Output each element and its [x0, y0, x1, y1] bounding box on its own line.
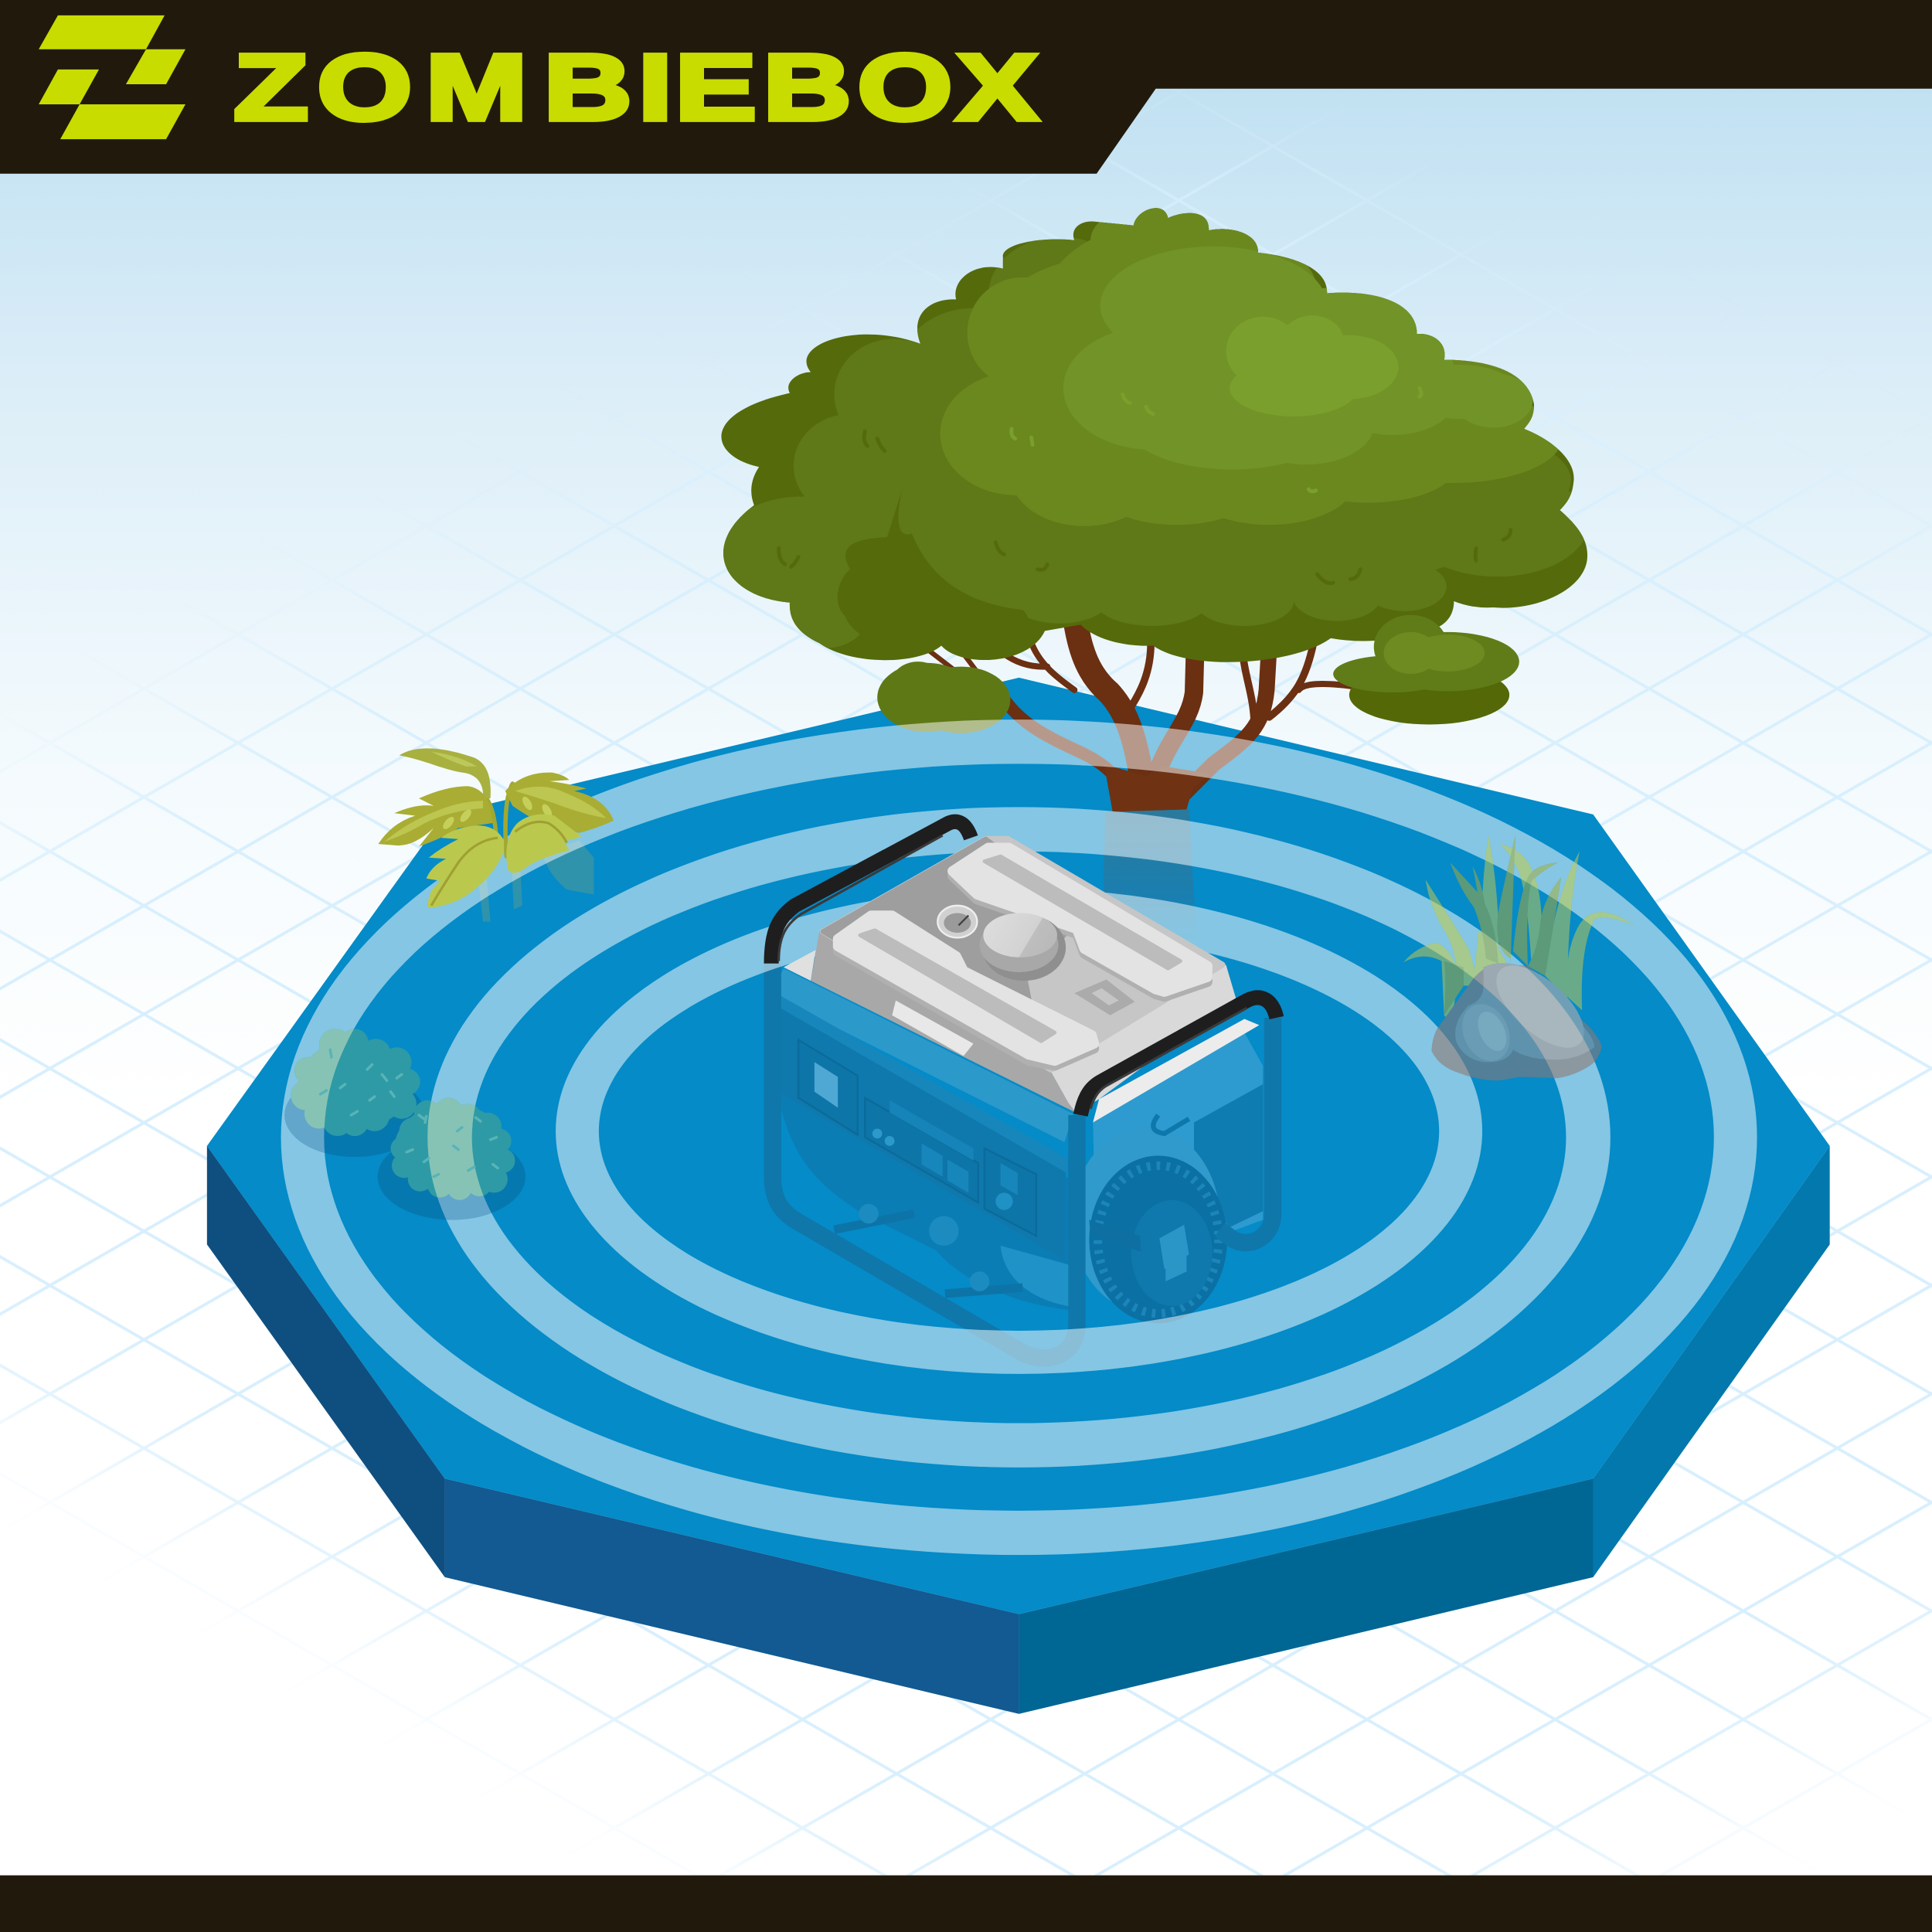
canopy silhouette [721, 208, 1587, 662]
leaf: bottom right [506, 815, 582, 872]
small left bush [877, 662, 1010, 733]
generator above water [771, 821, 1277, 1122]
housing right face [1051, 964, 1236, 1113]
rear plate [784, 950, 815, 981]
plant reflection in water [478, 840, 594, 922]
tree [719, 203, 1588, 812]
right upper panel [1093, 1032, 1263, 1281]
leaf: bottom left [427, 825, 504, 908]
submerged trunk [1103, 810, 1198, 961]
left handle [771, 821, 971, 964]
leaf: left [378, 786, 493, 846]
submerged bushes [284, 1029, 526, 1219]
fuel cap [980, 913, 1066, 981]
tropical plant [378, 748, 614, 908]
water ripple rings [281, 719, 1757, 1555]
fuel gauge [937, 906, 977, 937]
housing top [823, 839, 1223, 1070]
logo icon [39, 15, 185, 139]
front lid panel [838, 916, 1094, 1066]
canopy shading layers [719, 203, 1588, 650]
generator submerged body [769, 964, 1273, 1358]
lower tank highlight [1001, 1246, 1084, 1308]
control panel face [769, 991, 1066, 1260]
housing left face [811, 931, 1076, 1113]
header bar [0, 0, 1932, 174]
generator frame [773, 964, 1273, 1358]
white label [892, 1001, 974, 1056]
footer bar [0, 1876, 1932, 1932]
embossed logo plate [1074, 980, 1134, 1015]
fuel hose [1153, 1115, 1189, 1134]
canopy leaf ticks [779, 388, 1511, 583]
tree trunk base [1104, 764, 1210, 812]
engine collar [1072, 1128, 1219, 1312]
dark lower-left canopy patch [838, 490, 1028, 634]
switch panel [985, 1148, 1036, 1236]
grass [1403, 835, 1634, 1022]
logo wordmark: ZOMBIEBOX [234, 35, 1038, 140]
engine tank [776, 1084, 1084, 1311]
small right bush [1333, 615, 1519, 725]
rock [1432, 951, 1602, 1080]
leaf: top curl [400, 748, 491, 798]
plant stems [485, 784, 512, 856]
water platform [207, 678, 1830, 1714]
sockets panel [865, 1098, 978, 1202]
recoil starter [1089, 1156, 1227, 1323]
tree trunk and branches [929, 622, 1353, 794]
skid bars and oil knob [834, 1204, 1022, 1294]
alternator box [1194, 1084, 1263, 1227]
leaf: right [505, 773, 614, 833]
panel top lip [770, 968, 1073, 1142]
right handle [1080, 998, 1277, 1115]
right-side white strip [1093, 1019, 1259, 1122]
rear lid panel [952, 848, 1207, 997]
gauge box [798, 1040, 858, 1134]
